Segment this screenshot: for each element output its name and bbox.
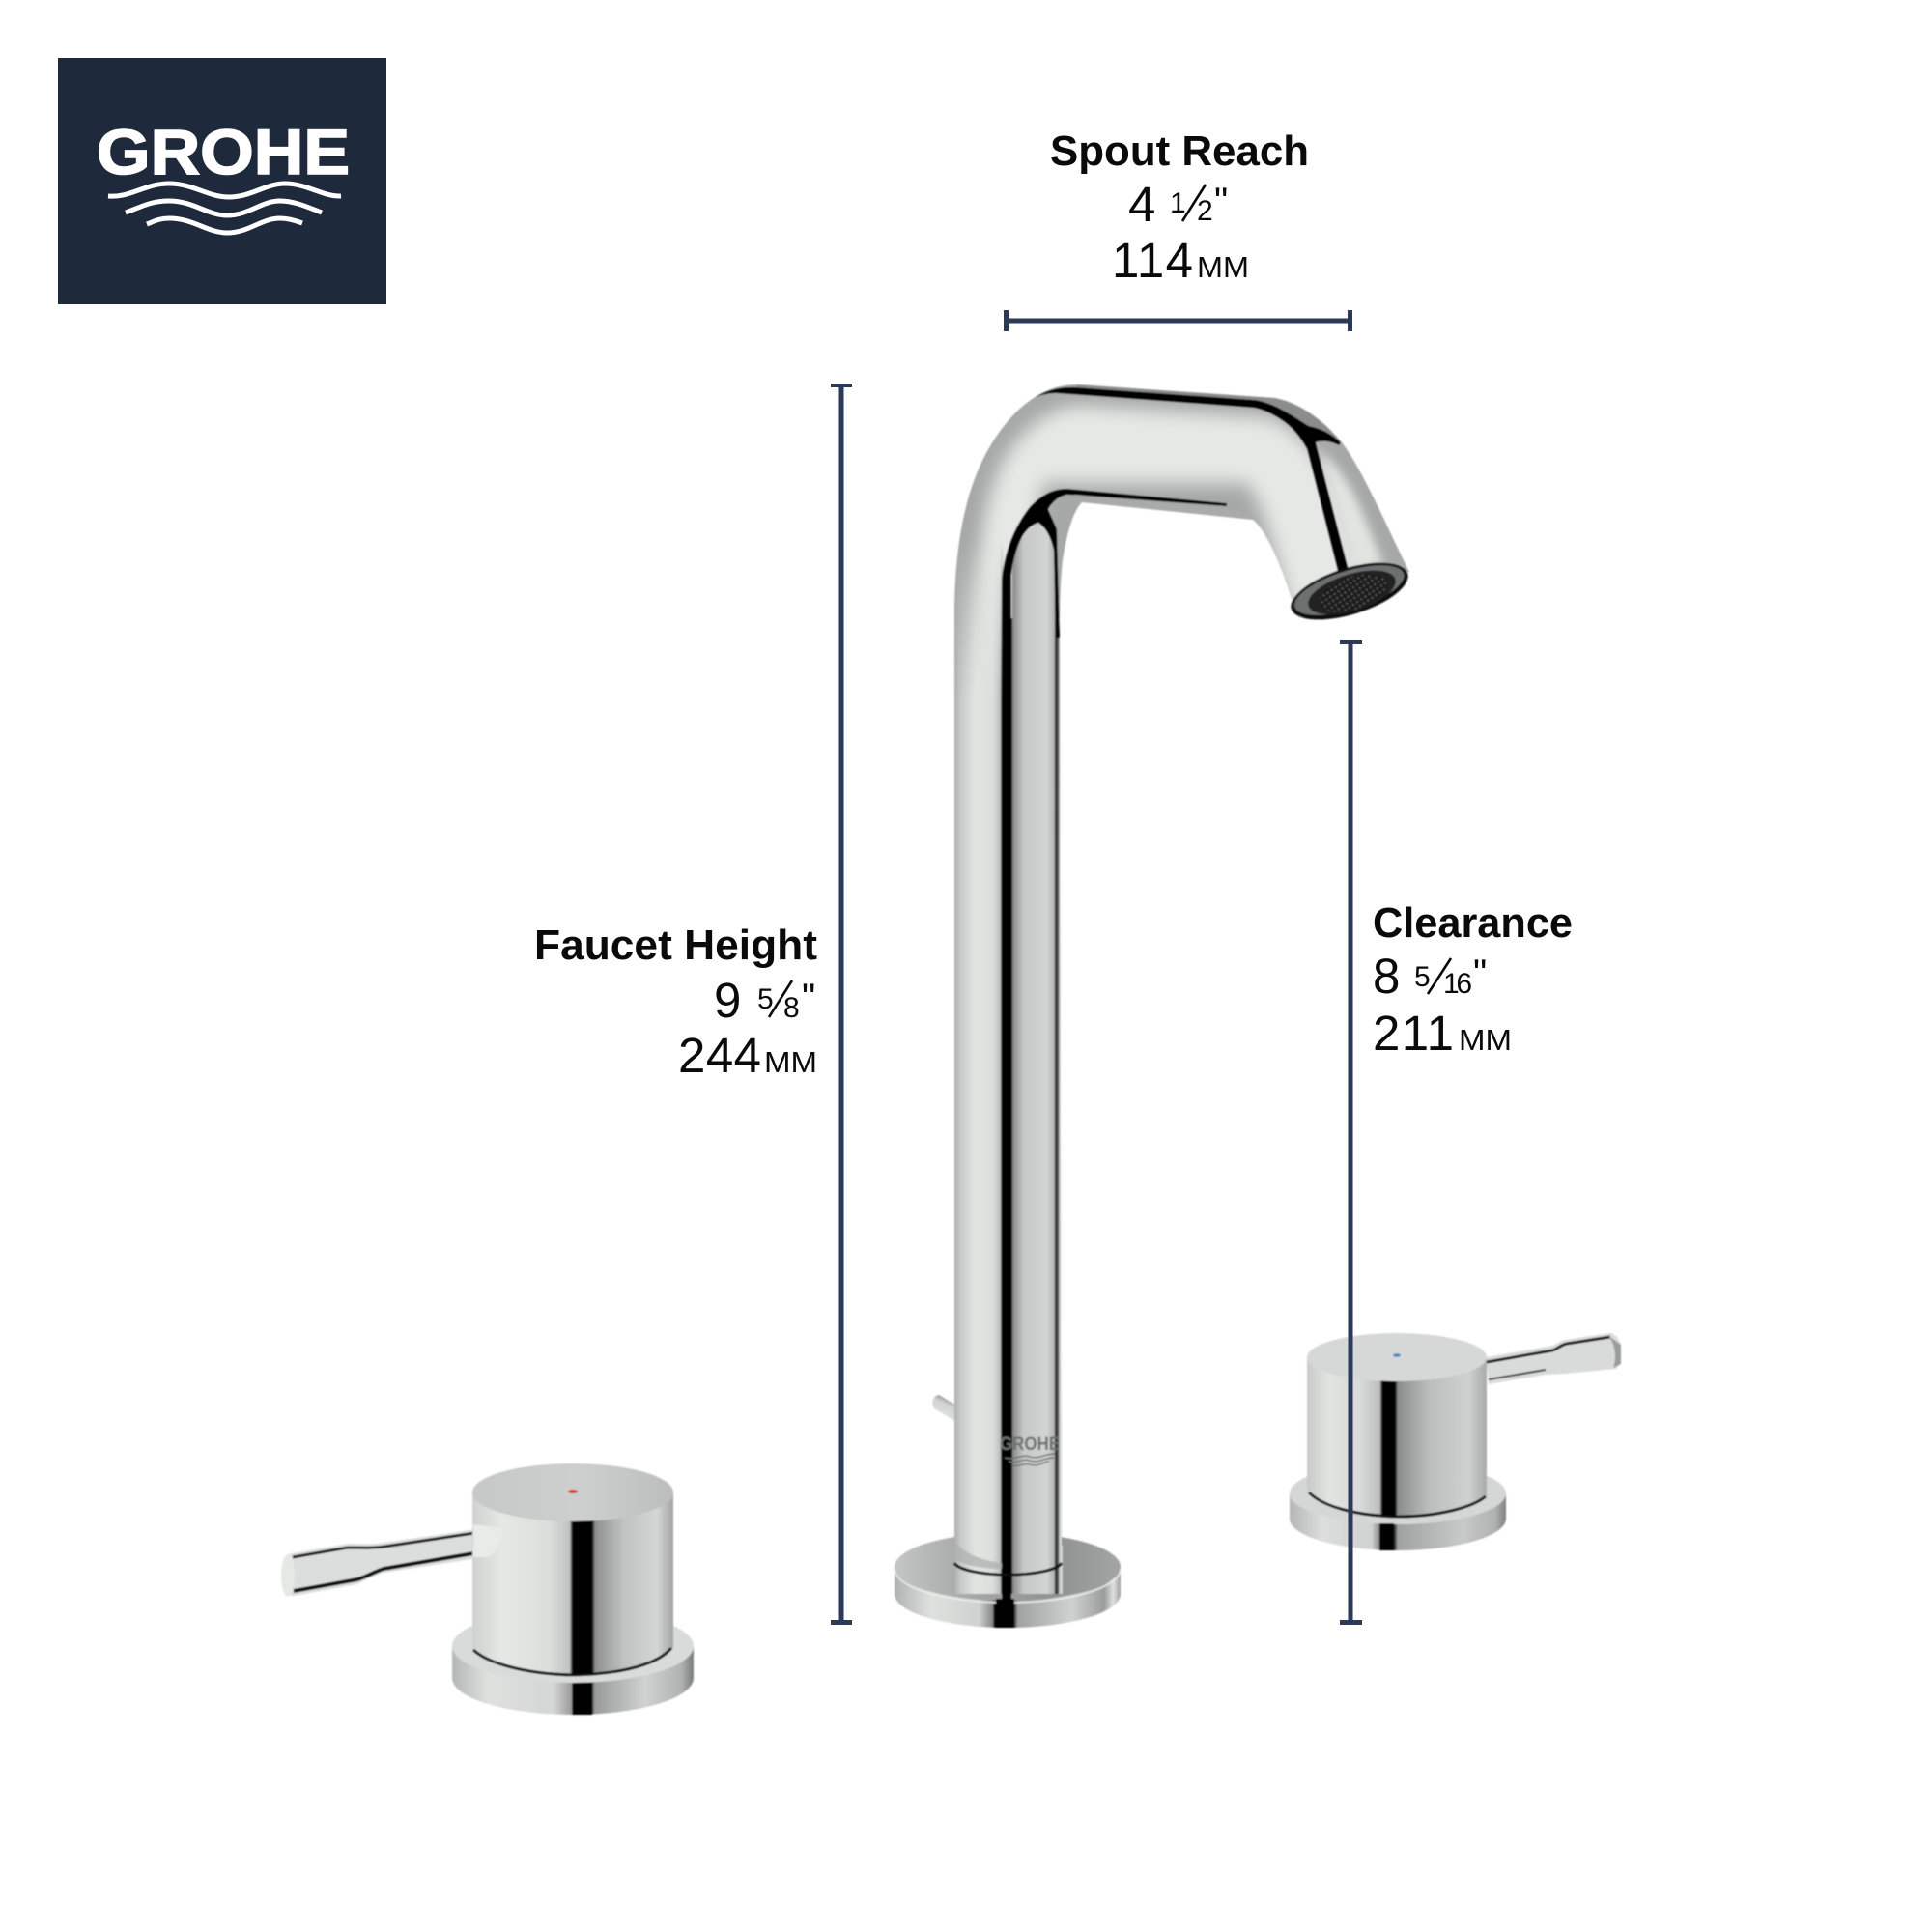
engraved small logo on stem: GROHE	[1000, 1435, 1060, 1455]
stem straight section	[1002, 618, 1063, 1594]
right handle base ring	[1290, 1463, 1506, 1550]
right handle (cold)	[1290, 1333, 1621, 1550]
label: clearance: 211	[1373, 1006, 1454, 1061]
base of stem	[953, 1542, 1063, 1594]
under-rim band	[1074, 493, 1111, 497]
label: clearance: MM	[1459, 1023, 1512, 1057]
label: faucet height: 8	[783, 992, 800, 1024]
label: faucet height: 9	[714, 973, 741, 1028]
upper-right dark band	[1036, 387, 1349, 572]
label: faucet height: 244	[678, 1028, 761, 1083]
base front band	[996, 1577, 1014, 1628]
dimension: clearance bar	[1340, 640, 1362, 1625]
spout body	[947, 377, 1420, 1594]
logo wordmark: GROHE	[97, 116, 350, 187]
label: spout reach: 1	[1170, 187, 1186, 219]
faucet spout and stem	[895, 377, 1420, 1628]
left handle base ring	[452, 1609, 694, 1715]
label: faucet height: Faucet Height	[534, 922, 817, 969]
label: faucet height	[534, 922, 817, 1083]
left handle (hot)	[281, 1463, 694, 1715]
label: clearance: "	[1473, 952, 1487, 995]
left handle lever	[281, 1528, 486, 1597]
logo: GROHE badge	[58, 58, 386, 304]
label: faucet height: MM	[764, 1045, 817, 1079]
label: clearance: 16	[1443, 968, 1472, 1000]
pop-up rod	[932, 1395, 958, 1422]
label: spout reach: MM	[1197, 250, 1249, 284]
label: spout reach: Spout Reach	[1050, 128, 1309, 175]
label: clearance: Clearance	[1373, 899, 1573, 947]
aerator	[1285, 552, 1414, 631]
label: clearance: 8	[1373, 949, 1400, 1004]
dimension: faucet height bar	[831, 384, 852, 1625]
label: spout reach	[1050, 128, 1309, 288]
stem inner light tube	[1010, 524, 1057, 619]
label: spout reach: 2	[1197, 195, 1213, 227]
right handle cylinder	[1307, 1333, 1487, 1517]
logo waves	[108, 184, 341, 233]
hot indicator	[568, 1490, 578, 1493]
label: clearance: 5	[1414, 961, 1431, 993]
label: spout reach: "	[1214, 181, 1228, 223]
right handle lever	[1486, 1333, 1621, 1384]
stem left part fading into bend	[953, 541, 1003, 1594]
dimension: spout reach bar	[1004, 310, 1352, 331]
label: spout reach: 4	[1128, 177, 1155, 232]
right lobe highlight	[1320, 454, 1383, 570]
left handle cylinder	[472, 1463, 673, 1675]
base plate	[895, 1533, 1121, 1628]
engraved small logo on stem	[1000, 1435, 1060, 1465]
top outer sheen	[1077, 384, 1345, 446]
label: faucet height: "	[802, 977, 815, 1019]
label: clearance	[1373, 899, 1573, 1061]
lower-left dark band	[1002, 489, 1227, 638]
label: spout reach: 114	[1112, 233, 1193, 288]
label: faucet height: 5	[757, 983, 774, 1015]
cold indicator	[1393, 1353, 1401, 1357]
